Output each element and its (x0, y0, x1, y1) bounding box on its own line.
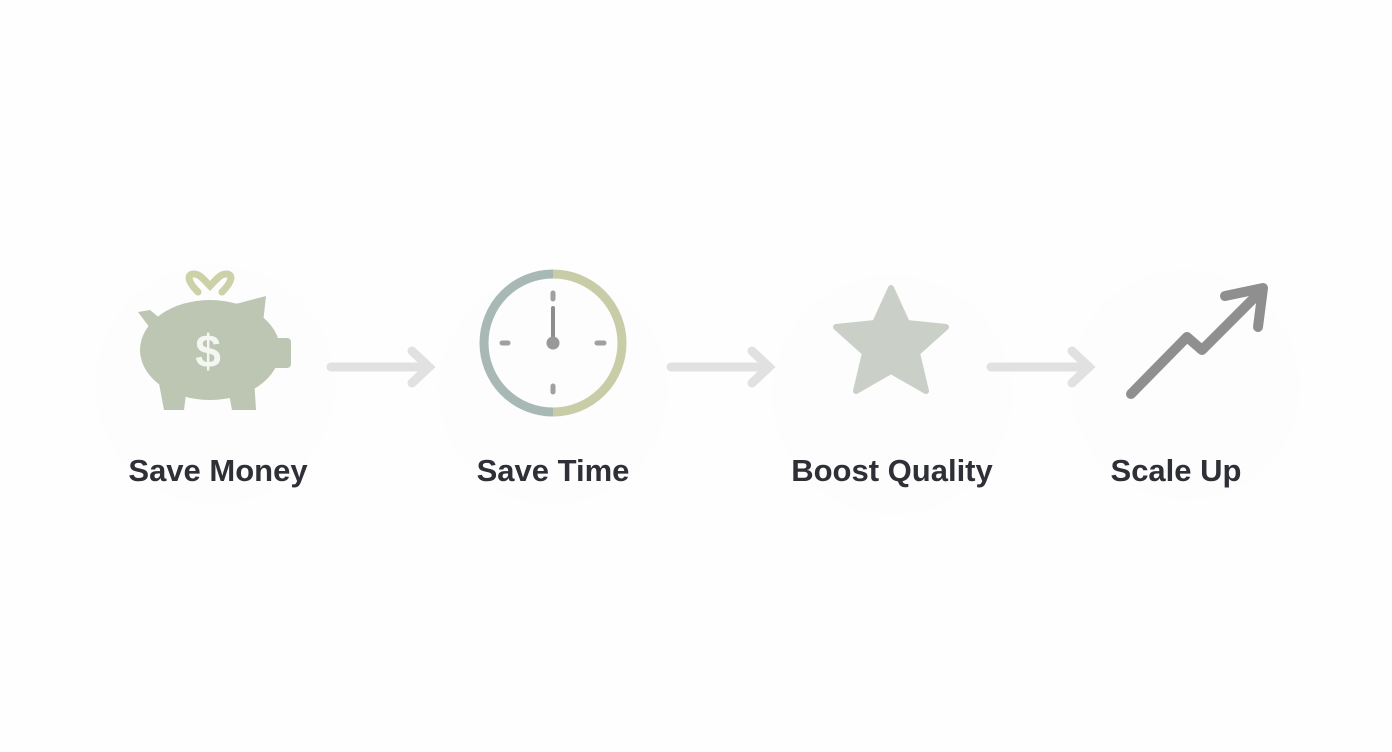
label: Save Time: Save Time (477, 453, 629, 488)
arrow 2 (671, 351, 769, 383)
arrow 3 (991, 351, 1089, 383)
label: Boost Quality: Boost Quality (791, 453, 994, 488)
step: boost quality (772, 275, 1012, 515)
step: scale up (1070, 270, 1300, 500)
icon: clock (484, 274, 622, 412)
label: Scale Up: Scale Up (1111, 453, 1241, 488)
step: save time (438, 274, 668, 505)
icon: piggy bank: $ (195, 325, 221, 377)
arrow 1 (331, 351, 429, 383)
label: Save Money: Save Money (128, 453, 308, 488)
icon: star (836, 288, 946, 391)
icon: trend arrow (1131, 288, 1263, 394)
step: save money (95, 265, 335, 505)
icon: piggy bank (138, 274, 291, 410)
